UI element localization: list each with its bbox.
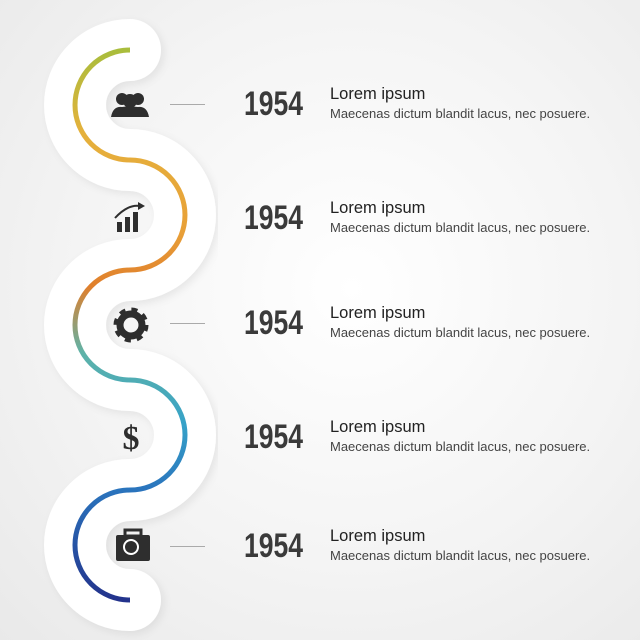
text 1: Maecenas dictum blandit lacus, nec posuere. xyxy=(330,106,590,121)
icon: people xyxy=(111,93,149,117)
text 3: Maecenas dictum blandit lacus, nec posuere. xyxy=(330,325,590,340)
title 3: Lorem ipsum xyxy=(330,304,425,322)
icon: chart xyxy=(115,202,145,232)
year 2: 1954 xyxy=(244,199,303,237)
title 2: Lorem ipsum xyxy=(330,199,425,217)
row 2 xyxy=(244,199,590,237)
icon: gear xyxy=(118,312,144,338)
title 5: Lorem ipsum xyxy=(330,527,425,545)
row 4 xyxy=(244,418,590,456)
year 4: 1954 xyxy=(244,418,303,456)
text 2: Maecenas dictum blandit lacus, nec posuere. xyxy=(330,220,590,235)
year 3: 1954 xyxy=(244,304,303,342)
icon: dollar: $ xyxy=(122,420,140,457)
year 5: 1954 xyxy=(244,527,303,565)
text 4: Maecenas dictum blandit lacus, nec posuere. xyxy=(330,439,590,454)
row 3 xyxy=(170,304,590,342)
icon: briefcase xyxy=(116,530,150,561)
row 5 xyxy=(170,527,590,565)
title 4: Lorem ipsum xyxy=(330,418,425,436)
title 1: Lorem ipsum xyxy=(330,85,425,103)
text 5: Maecenas dictum blandit lacus, nec posuere. xyxy=(330,548,590,563)
row 1 xyxy=(170,85,590,123)
year 1: 1954 xyxy=(244,85,303,123)
